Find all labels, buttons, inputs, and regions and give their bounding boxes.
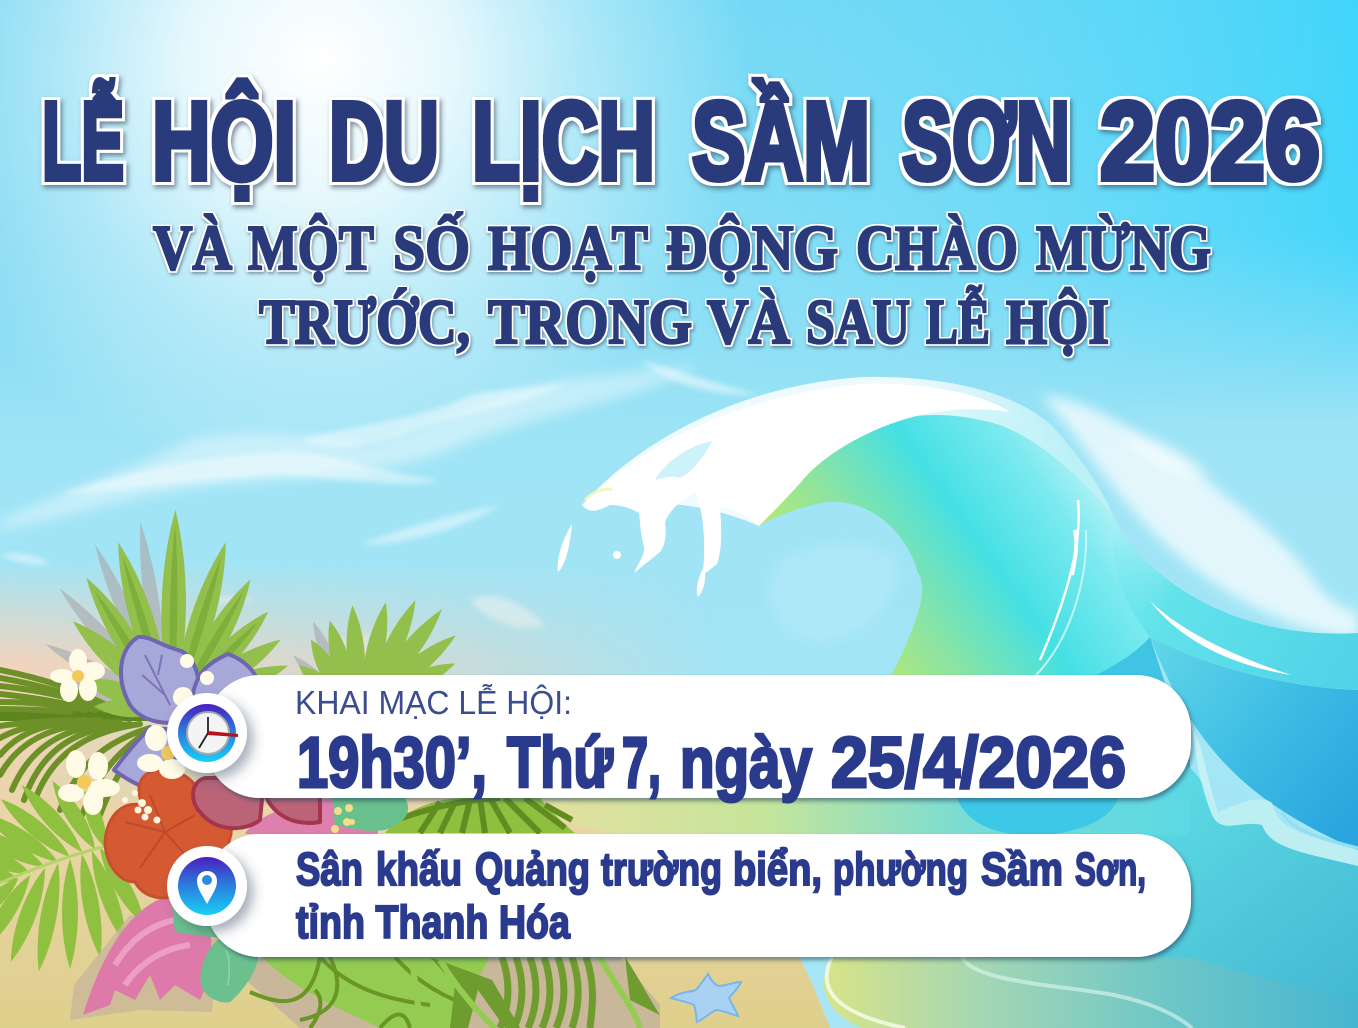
leaf: green teardrop — [172, 905, 259, 1002]
wave — [558, 377, 1358, 690]
subtitle: LỄ — [926, 285, 990, 357]
text: venue: trường — [601, 843, 722, 895]
text: opening date and time: ngày — [680, 724, 812, 803]
text: venue: phường — [833, 843, 968, 895]
flower: red hibiscus — [105, 770, 231, 898]
text: opening date and time: Thứ — [507, 724, 613, 803]
text: opening date and time: 19h30’, — [297, 724, 487, 803]
icon: starfish — [671, 974, 741, 1022]
flowers: small white buds — [173, 654, 214, 707]
subtitle: TRƯỚC, — [259, 286, 470, 357]
flowers: white plumeria — [50, 649, 188, 815]
subtitle: TRONG — [488, 286, 692, 357]
background: clouds — [0, 360, 1358, 665]
subtitle: SỐ — [393, 212, 470, 283]
title: SƠN — [902, 80, 1070, 203]
subtitle — [153, 212, 1211, 357]
background: sand — [0, 540, 830, 1028]
title: LỊCH — [472, 80, 655, 203]
text: venue: tỉnh Thanh Hóa — [296, 896, 570, 948]
title: 2026 — [1100, 80, 1320, 203]
title: DU — [329, 80, 439, 203]
icon: location pin — [167, 846, 247, 926]
title: LỄ — [42, 80, 124, 203]
foliage: right palm fan — [289, 597, 461, 710]
icon: clock — [167, 693, 247, 773]
text: venue: khấu — [376, 843, 462, 895]
subtitle: VÀ — [707, 286, 790, 357]
text: venue: Sân — [296, 843, 363, 895]
wave: white lip and splash — [582, 384, 1010, 575]
text: opening label: KHAI MẠC LỄ HỘI: — [295, 684, 572, 721]
title: HỘI — [152, 80, 296, 203]
text: opening date and time: 7, — [622, 724, 661, 803]
text: venue: Sơn, — [1075, 843, 1146, 895]
sea — [500, 630, 1358, 1028]
foliage: palm between the pills — [385, 798, 575, 833]
subtitle: HOẠT — [488, 212, 647, 283]
title: SẦM — [692, 80, 870, 203]
subtitle: VÀ — [153, 212, 232, 283]
foliage: lower left palm frond — [0, 777, 152, 973]
leaves: pink and green under the pill — [245, 798, 408, 834]
sea: shallows between the pills — [500, 798, 1190, 835]
flower: crimson petals — [193, 778, 320, 828]
subtitle: MỘT — [248, 212, 373, 283]
subtitle: MỪNG — [1036, 212, 1211, 283]
panel: venue pill — [205, 834, 1191, 957]
sea: foam line — [1192, 726, 1358, 866]
subtitle: CHÀO — [856, 212, 1018, 283]
subtitle: SAU — [806, 286, 910, 357]
wave: pale outer edge — [582, 377, 1114, 526]
text: opening date and time: 25/4/2026 — [831, 724, 1126, 803]
foliage: monstera and palm bottom — [240, 957, 660, 1028]
foliage: shadow fronds — [42, 521, 171, 715]
text: venue: Quảng — [475, 843, 590, 895]
leaves: pink monstera — [70, 895, 218, 1020]
foliage: dark palm frond left — [0, 670, 150, 815]
text: venue: Sầm — [981, 843, 1063, 895]
text: venue: biển, — [733, 843, 822, 895]
panel: opening time pill — [205, 675, 1191, 803]
subtitle: ĐỘNG — [666, 212, 838, 283]
foliage: top palm fan — [66, 510, 292, 718]
subtitle: HỘI — [1006, 286, 1109, 357]
leaves: purple — [114, 637, 262, 792]
sea: wet shore — [824, 957, 1358, 1028]
